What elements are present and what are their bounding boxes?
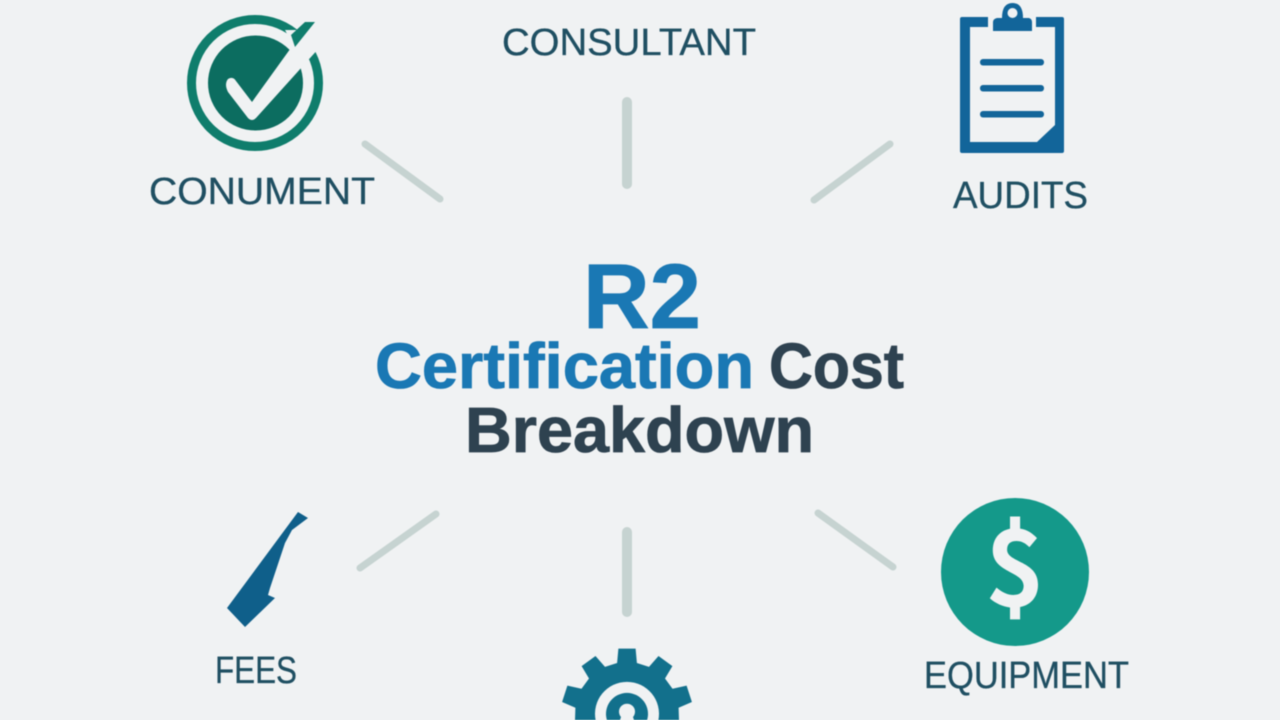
icon: clipboard [960,3,1064,153]
label: consultant: CONSULTANT [502,22,756,64]
icon: dollar coin [941,483,1089,646]
title: Cost [769,330,904,402]
connector: bottom left [360,514,436,568]
icon: fees shape [227,512,308,627]
title: Breakdown [465,394,814,466]
connector: bottom right [818,513,893,567]
label: fees: FEES [215,650,297,692]
connector: bottom [622,532,632,612]
title: R2 [583,246,701,348]
icon: gear [562,649,692,720]
icon: dollar coin: $ [985,483,1045,637]
label: audits: AUDITS [953,175,1088,217]
connector: top right [814,144,890,200]
icon: check badge [192,20,320,146]
label: conument: CONUMENT [149,171,375,213]
title: Certification [375,330,754,402]
title [375,246,904,466]
connector: top left [365,144,440,199]
connector: top [622,102,632,184]
label: equipment: EQUIPMENT [924,655,1129,697]
